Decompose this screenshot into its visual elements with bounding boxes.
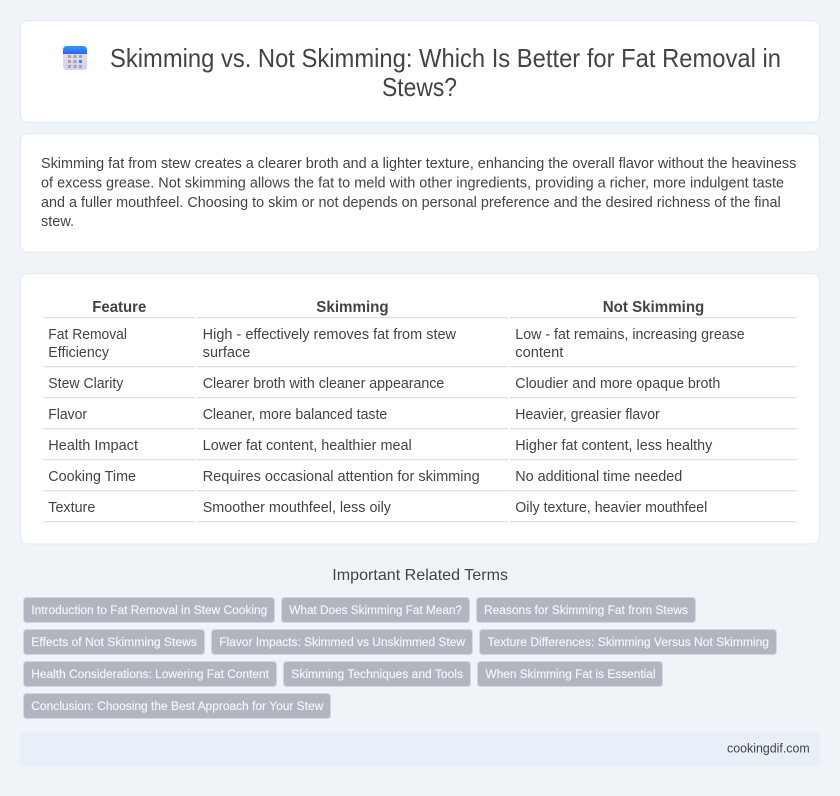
row: health impact: Lower fat content, healthier meal xyxy=(203,438,412,454)
row: fat removal efficiency: content xyxy=(515,345,563,361)
title: Skimming vs. Not Skimming: Which Is Better for Fat Removal in xyxy=(110,45,781,73)
row: cooking time: Cooking Time xyxy=(48,469,136,485)
tag: texture differences: Texture Differences: Skimming Versus Not Skimming xyxy=(488,635,769,649)
tag: reasons xyxy=(476,598,696,622)
title: Stews? xyxy=(382,74,457,102)
row: stew clarity: Cloudier and more opaque broth xyxy=(515,376,720,392)
row: cooking time: Requires occasional attention for skimming xyxy=(203,469,480,485)
tag: health considerations: Health Considerations: Lowering Fat Content xyxy=(31,667,270,681)
row: flavor: Cleaner, more balanced taste xyxy=(203,407,387,423)
row: health impact xyxy=(43,438,797,460)
table header: Skimming xyxy=(316,299,389,316)
icon: calendar xyxy=(63,46,87,70)
table header xyxy=(43,299,797,318)
title xyxy=(110,45,781,102)
row: fat removal efficiency: Low - fat remains, increasing grease xyxy=(515,327,745,343)
tag: what does skimming mean: What Does Skimming Fat Mean? xyxy=(289,603,462,617)
tag: when essential xyxy=(478,662,662,686)
row: stew clarity: Stew Clarity xyxy=(48,376,124,392)
tag: flavor impacts xyxy=(212,630,472,654)
row: flavor xyxy=(43,407,797,429)
row: health impact: Higher fat content, less healthy xyxy=(515,438,713,454)
panel: header card xyxy=(20,20,820,122)
row: flavor: Flavor xyxy=(48,407,87,423)
tag: when essential: When Skimming Fat is Essential xyxy=(486,667,656,681)
tag: texture differences xyxy=(480,630,776,654)
row: cooking time xyxy=(43,469,797,491)
row: texture: Oily texture, heavier mouthfeel xyxy=(515,500,707,516)
tag: reasons: Reasons for Skimming Fat from Stews xyxy=(484,603,688,617)
summary text xyxy=(41,156,796,230)
panel: summary card xyxy=(20,134,820,252)
summary text: stew. xyxy=(41,214,74,230)
tag: health considerations xyxy=(24,662,276,686)
row: fat removal efficiency: High - effectively removes fat from stew xyxy=(203,327,457,343)
footer bar: cookingdif.com xyxy=(727,741,810,756)
row: fat removal efficiency: Efficiency xyxy=(48,345,110,361)
tag: techniques: Skimming Techniques and Tools xyxy=(291,667,463,681)
tag: effects xyxy=(24,630,204,654)
tag: flavor impacts: Flavor Impacts: Skimmed vs Unskimmed Stew xyxy=(219,635,465,649)
footer bar xyxy=(20,732,820,766)
row: texture xyxy=(43,500,797,522)
tag: techniques xyxy=(284,662,470,686)
row: fat removal efficiency: surface xyxy=(203,345,250,361)
tag: introduction: Introduction to Fat Removal in Stew Cooking xyxy=(31,603,267,617)
tag: conclusion xyxy=(24,694,330,718)
panel: comparison table xyxy=(20,274,820,544)
row: health impact: Health Impact xyxy=(48,438,138,454)
table header: Not Skimming xyxy=(603,299,704,316)
row: stew clarity xyxy=(43,376,797,398)
heading: important related terms: Important Related Terms xyxy=(332,567,508,584)
row: flavor: Heavier, greasier flavor xyxy=(515,407,660,423)
tag: conclusion: Conclusion: Choosing the Best Approach for Your Stew xyxy=(31,699,323,713)
tag: effects: Effects of Not Skimming Stews xyxy=(31,635,197,649)
tag: introduction xyxy=(24,598,274,622)
row: stew clarity: Clearer broth with cleaner appearance xyxy=(203,376,444,392)
row: cooking time: No additional time needed xyxy=(515,469,682,485)
tag list xyxy=(24,598,776,718)
summary text: and a fuller mouthfeel. Choosing to skim or not depends on personal preference and the desired richness of the final xyxy=(41,195,781,211)
row: texture: Smoother mouthfeel, less oily xyxy=(203,500,392,516)
row: fat removal efficiency xyxy=(43,327,797,367)
row: texture: Texture xyxy=(48,500,95,516)
table header: Feature xyxy=(92,299,146,316)
row: fat removal efficiency: Fat Removal xyxy=(48,327,127,343)
summary text: Skimming fat from stew creates a clearer broth and a lighter texture, enhancing the overall flavor without the heaviness xyxy=(41,156,796,172)
tag: what does skimming mean xyxy=(282,598,470,622)
summary text: of excess grease. Not skimming allows the fat to meld with other ingredients, providing a richer, more indulgent taste xyxy=(41,176,784,192)
